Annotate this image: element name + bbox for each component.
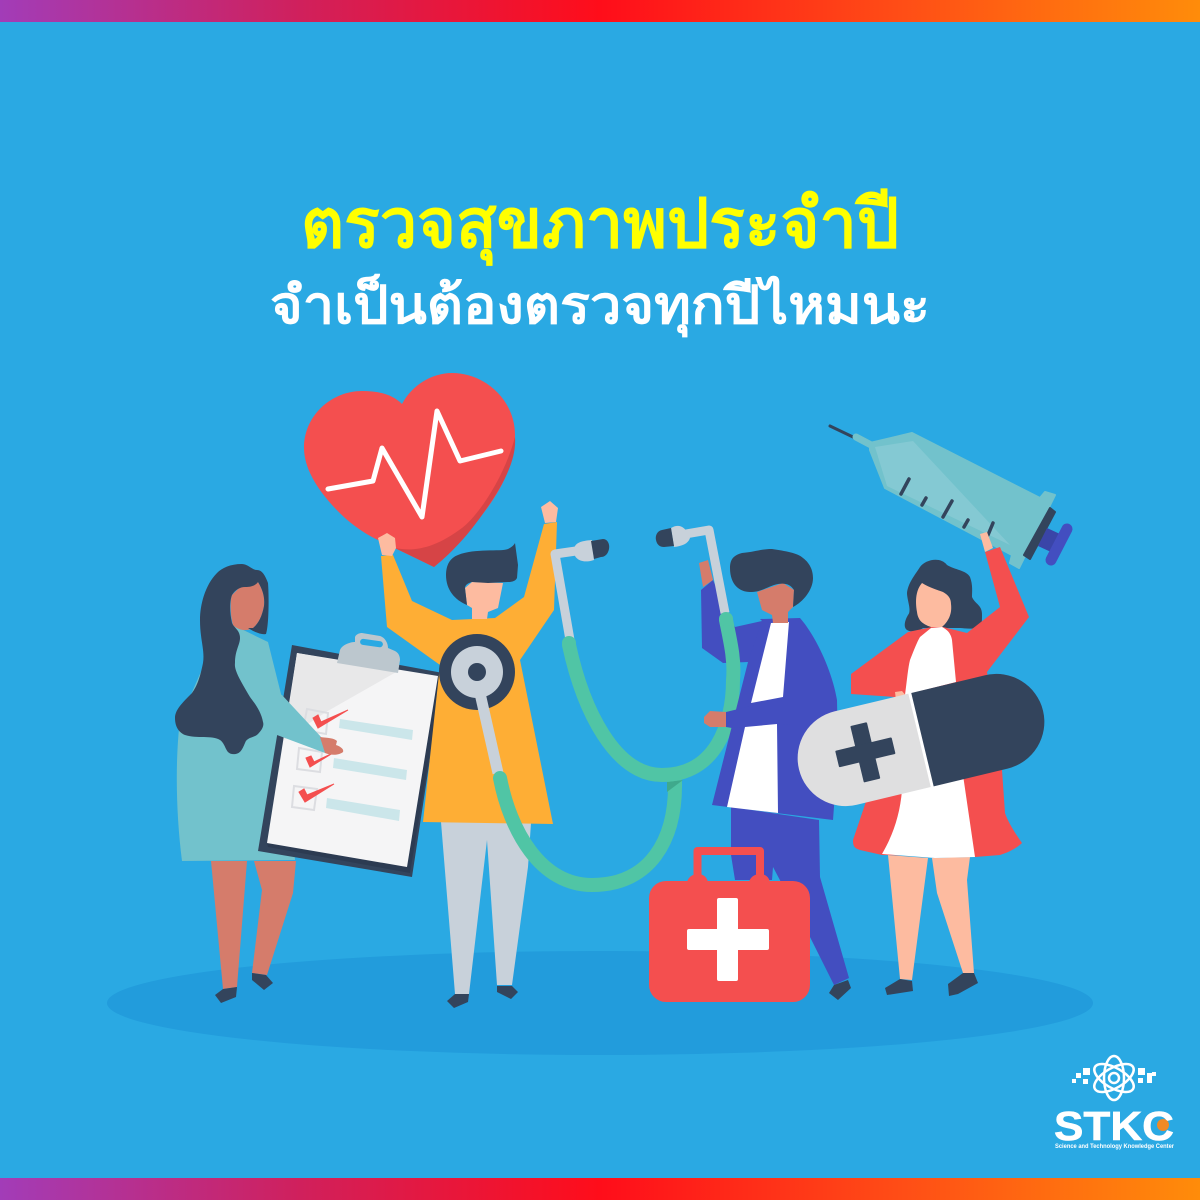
check marks: [299, 710, 348, 802]
trousers: [441, 822, 531, 994]
logo wordmark: STKC: [1054, 1103, 1174, 1149]
hands: [378, 501, 558, 556]
person: woman in red: [851, 532, 1029, 996]
trousers: [731, 807, 849, 985]
checklist rows: [326, 719, 413, 821]
chest piece: [439, 634, 515, 710]
dress lower: [882, 775, 975, 858]
legs: [888, 855, 974, 980]
arm and hand on clipboard: [270, 690, 343, 755]
logo: STKC: [1054, 1056, 1175, 1150]
hair: [730, 549, 813, 607]
icon: syringe: [830, 426, 1067, 568]
green caps: [562, 636, 576, 650]
person: woman with clipboard: [175, 564, 296, 1003]
shirt: [381, 522, 557, 824]
icon: first aid kit: [649, 851, 810, 1002]
title: ตรวจสุขภาพประจำปี: [301, 186, 899, 266]
face: [231, 582, 264, 630]
face: [465, 582, 503, 619]
arm of man in blue suit: [701, 580, 762, 663]
shoes: [447, 986, 518, 1008]
hand: [704, 711, 726, 727]
logo tagline: Science and Technology Knowledge Center: [1055, 1144, 1175, 1150]
ground shadow: [107, 951, 1093, 1055]
person: man in yellow: [378, 501, 558, 1008]
legs: [211, 861, 247, 989]
shoes: [885, 973, 978, 996]
dress: [177, 625, 295, 861]
icon: heart with pulse: [304, 373, 515, 567]
shirt: [727, 622, 789, 813]
forearm: [726, 695, 790, 728]
hand raised: [699, 560, 713, 587]
bottom gradient bar: [0, 1178, 1200, 1200]
tubes: [500, 778, 675, 885]
shoes: [215, 973, 273, 1003]
coat: [851, 547, 1029, 857]
top gradient bar: [0, 0, 1200, 22]
stethoscope: [439, 526, 733, 885]
face: [757, 583, 794, 623]
ear tips: [574, 540, 594, 561]
checkboxes: [292, 709, 328, 810]
jacket: [712, 618, 838, 820]
logo pixels: [1072, 1068, 1156, 1084]
subtitle: จำเป็นต้องตรวจทุกปีไหมนะ: [270, 274, 930, 338]
icon: pill: [788, 664, 1054, 816]
clipboard: [258, 633, 443, 877]
shoe: [829, 980, 851, 1000]
clip: [337, 633, 400, 673]
hair: [446, 543, 518, 605]
hair: [905, 560, 982, 631]
hand: [980, 532, 993, 552]
face: [916, 583, 951, 632]
small hand: [895, 691, 908, 700]
dress upper: [905, 627, 956, 695]
person: man in blue suit: [704, 549, 851, 1000]
hair: [175, 564, 269, 754]
logo emblem: [1090, 1056, 1138, 1100]
